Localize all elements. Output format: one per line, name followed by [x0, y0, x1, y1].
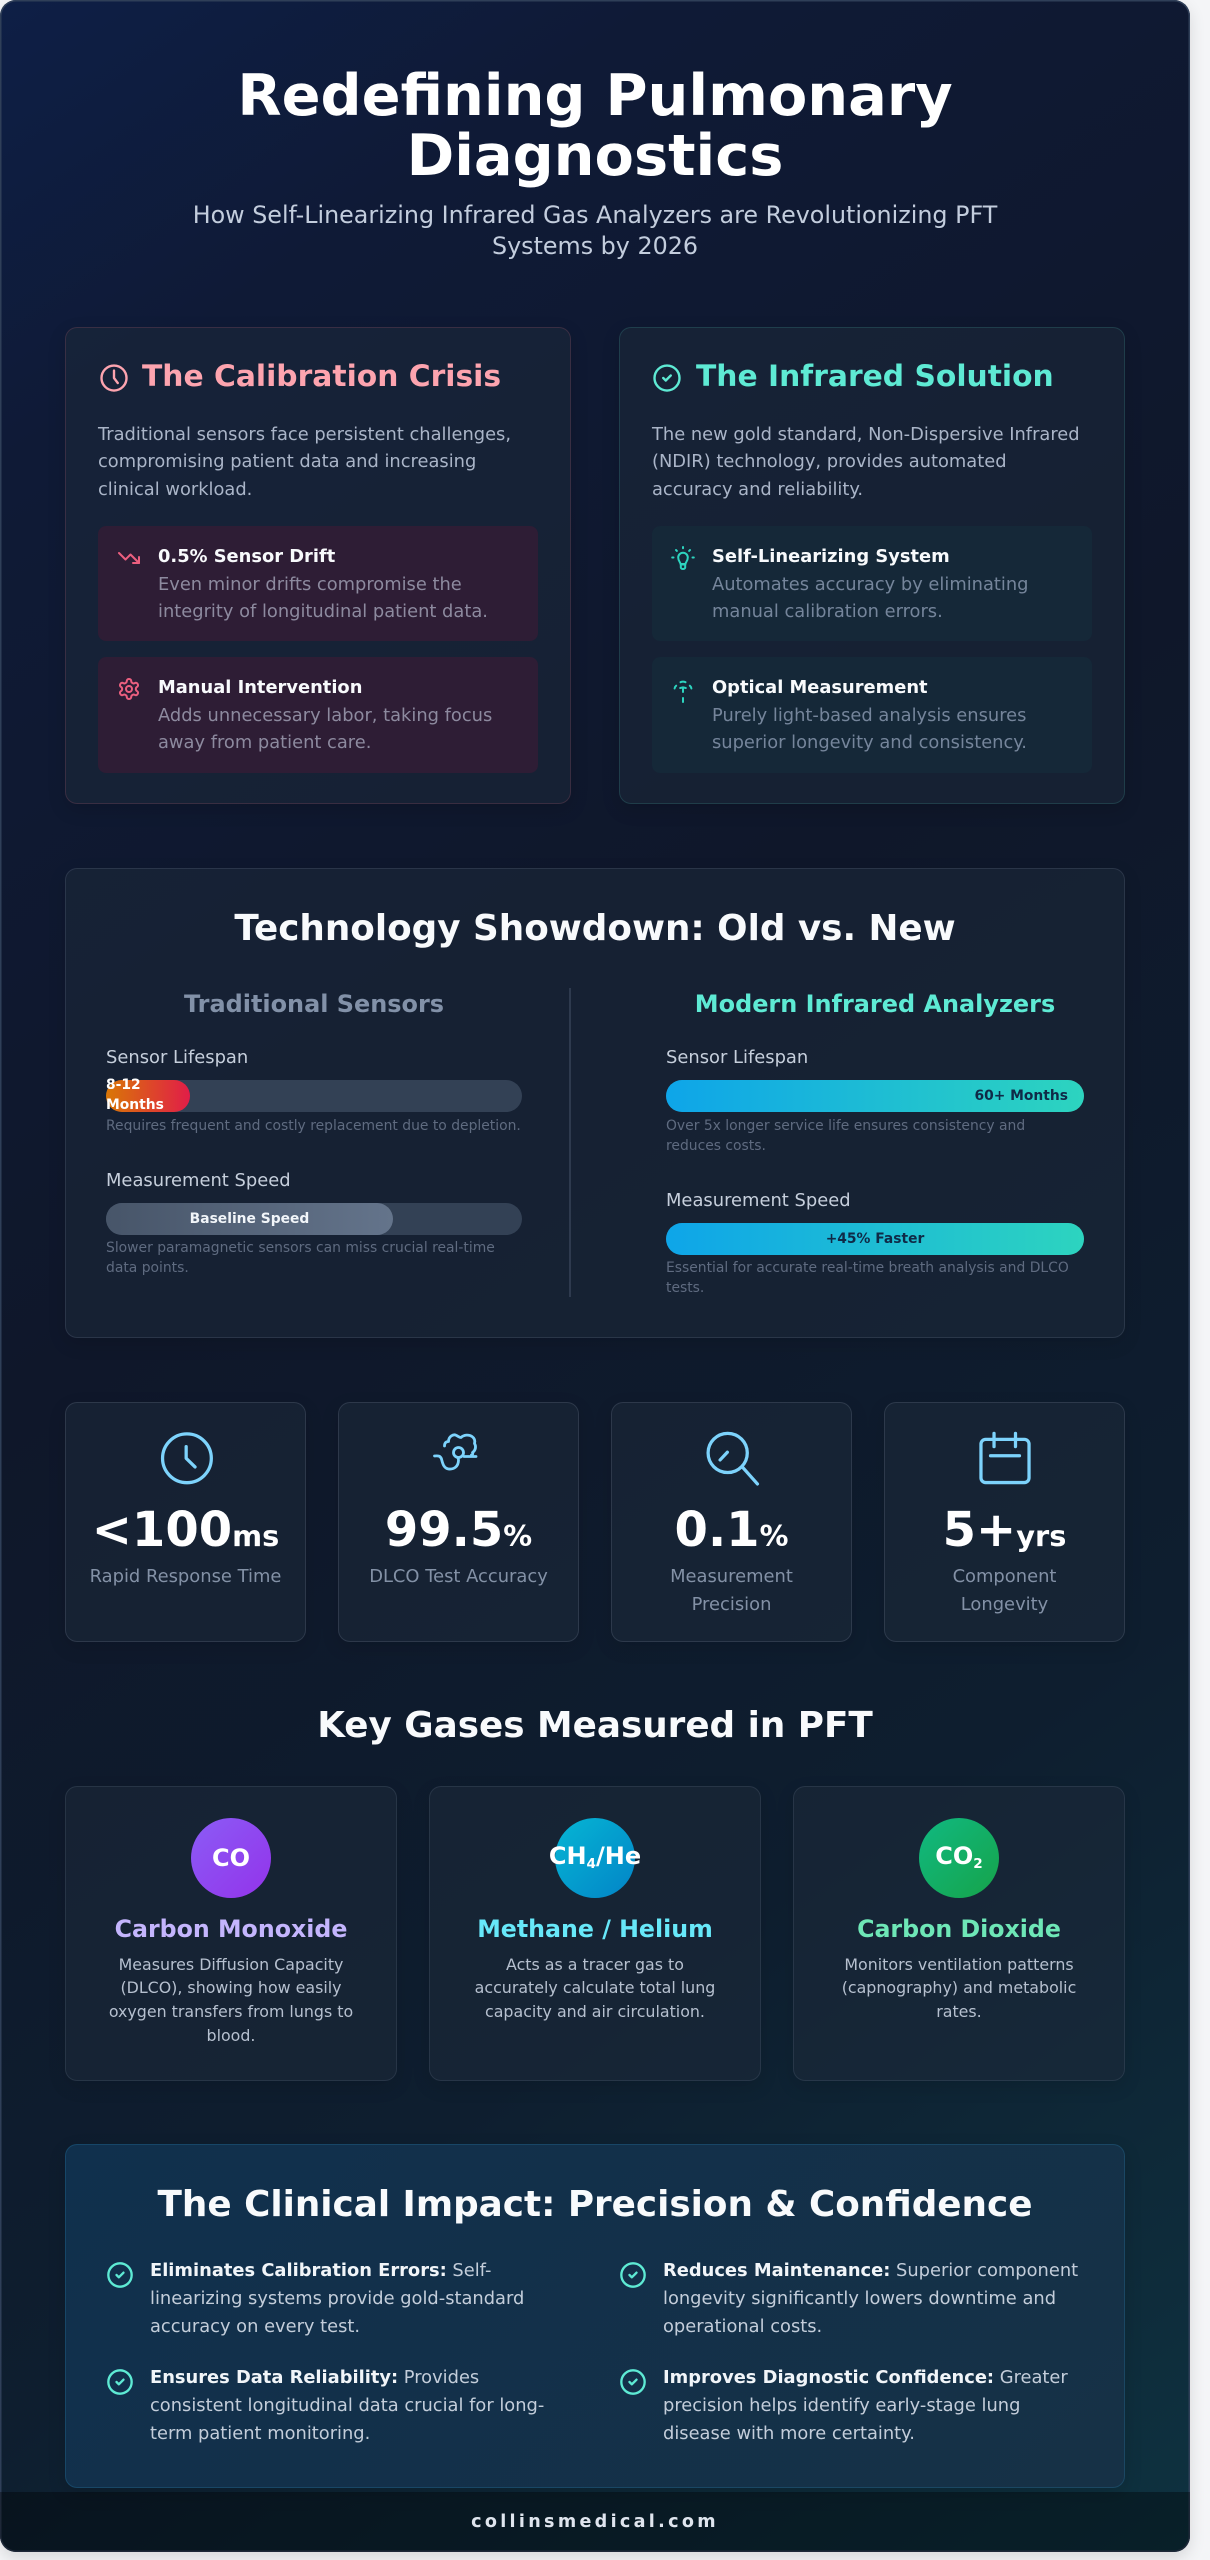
- note: lifespan modern: [666, 1118, 1025, 1154]
- value: 99.5%: [385, 1502, 532, 1558]
- self-linearizing text: Self-Linearizing System: [712, 546, 950, 567]
- gas description: Acts as a tracer gas to: [506, 1954, 684, 1974]
- heading: the infrared solution: The Infrared Solution: [696, 359, 1054, 394]
- icon: lungs: [433, 1433, 478, 1470]
- intro text: accuracy and reliability.: [652, 479, 863, 500]
- gas description: Measures Diffusion Capacity: [119, 1954, 343, 1974]
- icon: check: [107, 2369, 133, 2395]
- gas name: Carbon Monoxide: [115, 1914, 347, 1942]
- heading: technology showdown: Technology Showdown: Old vs. New: [234, 908, 956, 949]
- icon: check: [620, 2369, 646, 2395]
- heading: key gases: Key Gases Measured in PFT: [317, 1705, 873, 1746]
- icon: check: [107, 2262, 133, 2288]
- note: lifespan traditional: Requires frequent and costly replacement due to depletion.: [106, 1118, 521, 1134]
- manual intervention text: [158, 677, 492, 753]
- card: self-linearizing system: [652, 526, 1092, 641]
- stat: dlco accuracy: [338, 1402, 579, 1642]
- impact: reduces maintenance: longevity significantly lowers downtime and: [663, 2288, 1056, 2309]
- footer: collinsmedical.com: [471, 2512, 719, 2532]
- self-linearizing text: manual calibration errors.: [712, 601, 943, 622]
- label: Rapid Response Time: [90, 1566, 281, 1586]
- sensor drift text: Even minor drifts compromise the: [158, 574, 462, 595]
- icon: trending down: [118, 552, 140, 564]
- gas description: blood.: [207, 2026, 255, 2045]
- icon: clock: [100, 364, 128, 392]
- intro text: [652, 424, 1080, 500]
- impact: eliminates calibration errors: [150, 2260, 524, 2337]
- sensor drift text: [158, 546, 488, 622]
- intro text: The new gold standard, Non-Dispersive Infrared: [652, 424, 1080, 444]
- icon: CH4/He badge: [555, 1818, 635, 1898]
- impact: ensures data reliability: [150, 2367, 544, 2444]
- gas name: Carbon Dioxide: [857, 1914, 1061, 1942]
- optical measurement text: [712, 677, 1027, 753]
- note: speed traditional: [106, 1240, 495, 1276]
- gas description: capacity and air circulation.: [485, 2002, 705, 2021]
- note: speed modern: Essential for accurate real-time breath analysis and DLCO: [666, 1260, 1069, 1276]
- impact: ensures data reliability: Ensures Data Reliability: Provides: [150, 2367, 479, 2388]
- impact: reduces maintenance: [663, 2260, 1078, 2337]
- footer: [0, 2492, 1190, 2552]
- stat: component longevity: [884, 1402, 1125, 1642]
- gas name: Methane / Helium: [477, 1914, 713, 1942]
- panel: technology showdown: [65, 868, 1125, 1338]
- gas description: [109, 1954, 353, 2045]
- title: Redefining Pulmonary: [237, 62, 953, 129]
- gas card: carbon monoxide: [65, 1786, 397, 2081]
- divider: [569, 988, 571, 1297]
- bar fill: 60+ months: [666, 1080, 1084, 1112]
- impact: eliminates calibration errors: linearizing systems provide gold-standard: [150, 2288, 524, 2309]
- icon: CO2 badge: [919, 1818, 999, 1898]
- bar: sensor lifespan traditional: [106, 1080, 522, 1112]
- gas description: oxygen transfers from lungs to: [109, 2002, 353, 2021]
- panel: the calibration crisis: [65, 327, 571, 804]
- bar fill: 45% faster: +45% Faster: [826, 1231, 924, 1247]
- sensor drift text: 0.5% Sensor Drift: [158, 546, 335, 567]
- heading: the calibration crisis: The Calibration Crisis: [142, 359, 501, 394]
- metric label: speed modern: Measurement Speed: [666, 1190, 851, 1211]
- subtitle: [193, 201, 998, 260]
- bar: speed modern: [666, 1223, 1084, 1255]
- manual intervention text: Manual Intervention: [158, 677, 362, 698]
- stat: response time: [65, 1402, 306, 1642]
- icon: optical signal: [674, 680, 692, 703]
- icon: CO badge: [191, 1818, 271, 1898]
- impact: ensures data reliability: term patient monitoring.: [150, 2423, 370, 2444]
- gas description: rates.: [936, 2002, 982, 2021]
- bar fill: baseline speed: Baseline Speed: [190, 1211, 309, 1227]
- impact: improves diagnostic confidence: precision helps identify early-stage lung: [663, 2395, 1020, 2416]
- label: DLCO Test Accuracy: [369, 1566, 548, 1586]
- impact: improves diagnostic confidence: disease with more certainty.: [663, 2423, 915, 2444]
- impact: improves diagnostic confidence: [663, 2367, 1068, 2444]
- icon: CO badge: CO: [212, 1844, 250, 1872]
- note: speed traditional: Slower paramagnetic sensors can miss crucial real-time: [106, 1240, 495, 1256]
- label: Measurement: [670, 1566, 793, 1586]
- label: Precision: [692, 1594, 771, 1614]
- intro text: compromising patient data and increasing: [98, 451, 476, 472]
- bar fill: 60+ months: 60+ Months: [974, 1088, 1068, 1104]
- card: optical measurement: [652, 657, 1092, 773]
- gas description: accurately calculate total lung: [475, 1978, 715, 1997]
- bar: sensor lifespan modern: [666, 1080, 1084, 1112]
- subtitle: How Self-Linearizing Infrared Gas Analyzers are Revolutionizing PFT: [193, 201, 997, 229]
- title: [237, 62, 953, 189]
- gas description: [842, 1954, 1076, 2021]
- intro text: Traditional sensors face persistent challenges,: [98, 424, 511, 444]
- value: 5+yrs: [943, 1502, 1066, 1558]
- card: sensor drift: [98, 526, 538, 641]
- note: lifespan modern: Over 5x longer service life ensures consistency and: [666, 1118, 1025, 1134]
- panel: clinical impact: [65, 2144, 1125, 2488]
- panel: the infrared solution: [619, 327, 1125, 804]
- title: Diagnostics: [407, 122, 783, 189]
- sensor drift text: integrity of longitudinal patient data.: [158, 601, 488, 622]
- optical measurement text: Optical Measurement: [712, 677, 928, 698]
- gas description: [475, 1954, 715, 2021]
- column title: traditional sensors: Traditional Sensors: [184, 990, 444, 1018]
- impact: reduces maintenance: operational costs.: [663, 2316, 822, 2337]
- icon: gear: [119, 678, 139, 700]
- gas description: (DLCO), showing how easily: [120, 1978, 342, 1997]
- gas description: Monitors ventilation patterns: [844, 1954, 1074, 1974]
- optical measurement text: Purely light-based analysis ensures: [712, 705, 1026, 726]
- impact: improves diagnostic confidence: Improves Diagnostic Confidence: Greater: [663, 2367, 1068, 2388]
- gas card: methane helium: [429, 1786, 761, 2081]
- bar fill: 8-12 months: Months: [106, 1097, 164, 1113]
- card: manual intervention: [98, 657, 538, 773]
- value: 0.1%: [675, 1502, 788, 1558]
- metric label: speed traditional: Measurement Speed: [106, 1170, 291, 1191]
- impact: eliminates calibration errors: Eliminates Calibration Errors: Self-: [150, 2260, 491, 2281]
- heading: clinical impact: The Clinical Impact: Precision & Confidence: [158, 2184, 1032, 2225]
- icon: lightbulb: [671, 546, 695, 570]
- bar fill: baseline speed: [106, 1203, 393, 1235]
- intro text: (NDIR) technology, provides automated: [652, 451, 1007, 472]
- impact: eliminates calibration errors: accuracy on every test.: [150, 2316, 360, 2337]
- icon: calendar: [979, 1432, 1031, 1484]
- icon: clock: [160, 1432, 213, 1484]
- gas card: carbon dioxide: [793, 1786, 1125, 2081]
- note: lifespan modern: reduces costs.: [666, 1138, 766, 1154]
- stat: measurement precision: [611, 1402, 852, 1642]
- subtitle: Systems by 2026: [492, 232, 698, 260]
- intro text: [98, 424, 511, 500]
- icon: magnifier: [706, 1432, 760, 1486]
- bar fill: 45% faster: [666, 1223, 1084, 1255]
- optical measurement text: superior longevity and consistency.: [712, 732, 1027, 753]
- label: [953, 1566, 1056, 1614]
- impact: reduces maintenance: Reduces Maintenance: Superior component: [663, 2260, 1078, 2281]
- note: speed modern: [666, 1260, 1069, 1296]
- impact: ensures data reliability: consistent longitudinal data crucial for long-: [150, 2395, 544, 2416]
- bar fill: 8-12 months: [106, 1080, 190, 1112]
- icon: CH4/He badge: CH4/He: [549, 1842, 641, 1872]
- label: Longevity: [961, 1594, 1048, 1614]
- gas description: (capnography) and metabolic: [842, 1978, 1076, 1997]
- note: speed traditional: data points.: [106, 1260, 189, 1276]
- metric label: sensor lifespan modern: Sensor Lifespan: [666, 1047, 808, 1068]
- value: <100ms: [92, 1502, 279, 1558]
- label: Component: [953, 1566, 1056, 1586]
- icon: CO2 badge: CO2: [935, 1842, 983, 1872]
- intro text: clinical workload.: [98, 479, 252, 500]
- note: speed modern: tests.: [666, 1280, 704, 1296]
- manual intervention text: Adds unnecessary labor, taking focus: [158, 705, 492, 726]
- self-linearizing text: Automates accuracy by eliminating: [712, 574, 1028, 595]
- self-linearizing text: [712, 546, 1028, 622]
- bar: speed traditional: [106, 1203, 522, 1235]
- bar fill: 8-12 months: 8-12: [106, 1077, 141, 1093]
- icon: check: [620, 2262, 646, 2288]
- manual intervention text: away from patient care.: [158, 732, 371, 753]
- metric label: sensor lifespan traditional: Sensor Lifespan: [106, 1047, 248, 1068]
- label: [670, 1566, 793, 1614]
- column title: modern infrared analyzers: Modern Infrared Analyzers: [695, 990, 1055, 1018]
- icon: check circle: [653, 364, 681, 392]
